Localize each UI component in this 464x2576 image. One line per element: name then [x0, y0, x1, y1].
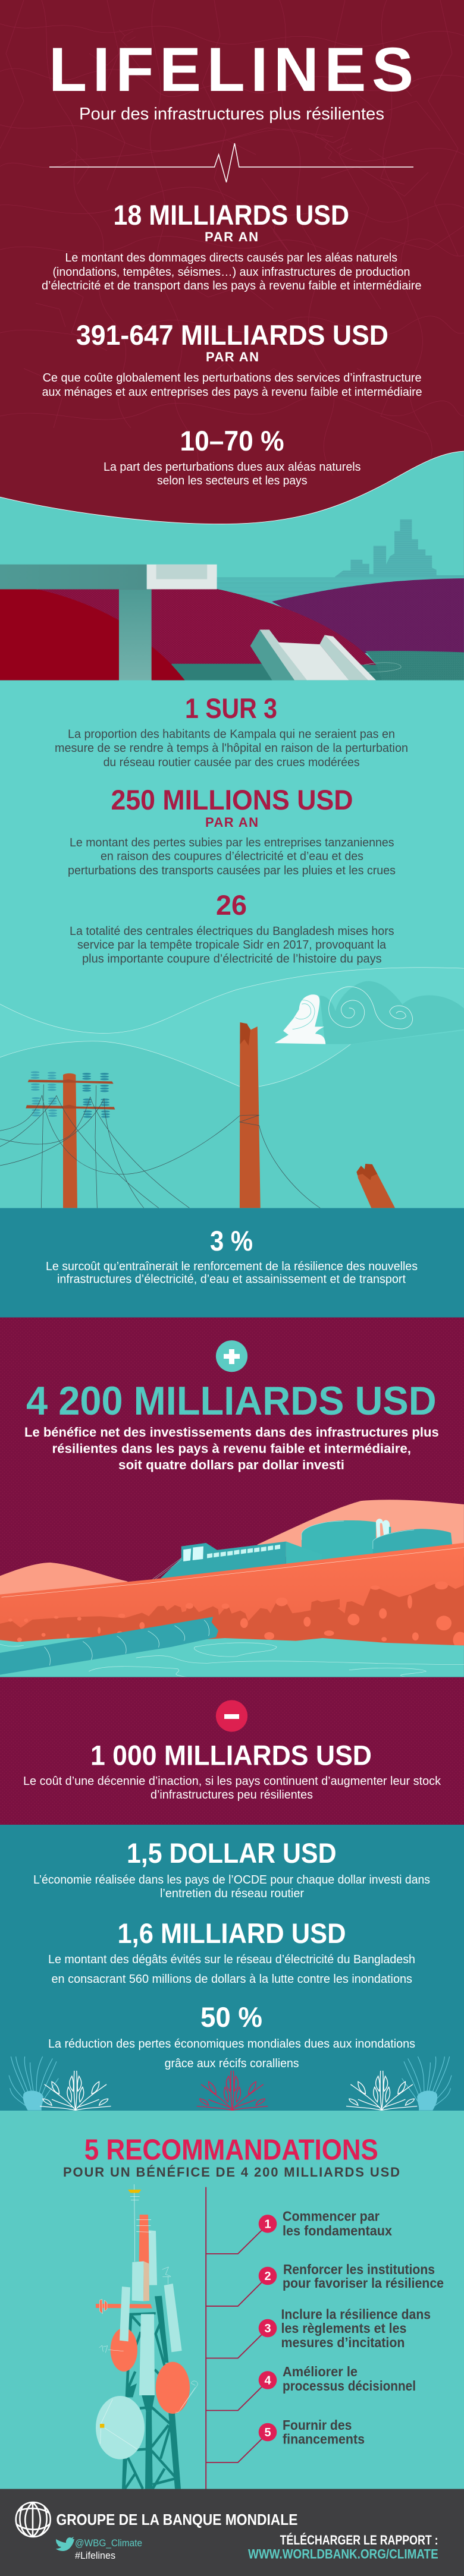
recommendation 1: les fondamentaux — [283, 2223, 392, 2238]
building — [160, 1542, 286, 1579]
title: LIFELINES — [49, 35, 413, 105]
stat: 50 % — [48, 2001, 415, 2070]
stat: 250 millions — [68, 784, 396, 877]
broken pole 2 — [240, 1022, 261, 1208]
broken pole 3 — [358, 1170, 395, 1208]
magenta hill — [37, 589, 377, 665]
stat: 1,5 dollar: 1,5 DOLLAR USD — [127, 1837, 337, 1869]
stat: 4 200 milliards: soit quatre dollars par dollar investi — [118, 1457, 344, 1472]
stat: 250 millions: en raison des coupures d’électricité et d’eau et des — [101, 850, 363, 863]
recommendation 3: Inclure la résilience dans — [281, 2306, 431, 2322]
illustration: power pole with wires — [0, 1071, 240, 1208]
recommendation 5: financements — [283, 2432, 365, 2447]
stat: 10-70 % — [104, 425, 360, 487]
stat: 1,5 dollar — [33, 1837, 430, 1900]
stat: 18 milliards: PAR AN — [205, 229, 258, 244]
stat: 1,6 milliard: en consacrant 560 millions de dollars à la lutte contre les inondations — [51, 1973, 412, 1986]
stat: 1 sur 3: La proportion des habitants de Kampala qui ne seraient pas en — [68, 728, 395, 741]
distant skyline — [335, 519, 464, 578]
stat: 1 sur 3: 1 SUR 3 — [185, 692, 277, 724]
wires — [0, 1084, 240, 1208]
teal sky with curved edge — [0, 451, 464, 681]
salmon dish 1 — [111, 2328, 137, 2372]
dark water — [171, 651, 464, 681]
red hill — [0, 589, 185, 681]
recommendation 3: 3 — [264, 2322, 271, 2335]
recommendation 3: les règlements et les — [281, 2320, 407, 2336]
cloud shadow — [319, 981, 464, 1044]
stat: 391-647 milliards: PAR AN — [206, 349, 259, 364]
stat: 1 000 milliards: d’infrastructures peu résilientes — [151, 1788, 313, 1802]
stat: 50 %: 50 % — [200, 2001, 262, 2033]
stat: 18 milliards: Le montant des dommages directs causés par les aléas naturels — [65, 251, 397, 264]
heading: 5 recommandations: POUR UN BÉNÉFICE DE 4 200 MILLIARDS USD — [63, 2165, 400, 2180]
stat: 4 200 milliards — [24, 1378, 439, 1472]
stat: 26 — [70, 889, 394, 965]
stat: 391-647 milliards: 391-647 MILLIARDS USD — [76, 319, 388, 351]
stat: 1 sur 3 — [55, 692, 408, 769]
recommendation 1 — [259, 2209, 392, 2238]
footer: @WBG_Climate — [75, 2537, 142, 2549]
stat: 26: plus importante coupure d’électricité de l’histoire du pays — [82, 952, 382, 965]
heading: 5 recommandations — [63, 2134, 400, 2180]
illustration: telecom tower — [96, 2184, 197, 2489]
recommendation 2: Renforcer les institutions — [283, 2262, 435, 2277]
stat: 10-70 %: La part des perturbations dues aux aléas naturels — [104, 461, 360, 474]
footer: GROUPE DE LA BANQUE MONDIALE — [56, 2511, 297, 2528]
recommendation 5 — [259, 2417, 365, 2447]
stat: 50 %: grâce aux récifs coralliens — [165, 2057, 299, 2070]
heartbeat divider — [49, 143, 413, 182]
stat: 1,5 dollar: L’économie réalisée dans les pays de l’OCDE pour chaque dollar investi dans — [33, 1873, 430, 1887]
recommendation 1: Commencer par — [283, 2209, 380, 2224]
storage tanks — [302, 1520, 376, 1562]
stat: 50 %: La réduction des pertes économiques mondiales dues aux inondations — [48, 2038, 415, 2051]
recommendation 4: 4 — [264, 2374, 271, 2387]
footer: #Lifelines — [75, 2550, 115, 2561]
icon: twitter bird — [56, 2537, 74, 2551]
pipeline — [0, 1617, 218, 1675]
stat: 18 milliards: 18 MILLIARDS USD — [113, 199, 349, 231]
stat: 1,6 milliard — [48, 1917, 415, 1986]
stat: 391-647 milliards: Ce que coûte globalement les perturbations des services d’infrastructure — [43, 371, 422, 385]
recommendation 2: 2 — [264, 2270, 271, 2283]
recommendation 1: 1 — [264, 2218, 271, 2231]
stat: 1 sur 3: mesure de se rendre à temps à l'hôpital en raison de la perturbation — [55, 742, 408, 755]
stat: 26: 26 — [216, 889, 247, 921]
stat: 250 millions: Le montant des pertes subies par les entreprises tanzaniennes — [70, 836, 394, 849]
stat: 26: La totalité des centrales électriques du Bangladesh mises hors — [70, 925, 394, 938]
illustration: broken poles — [240, 1022, 395, 1208]
stat: 10-70 %: 10–70 % — [180, 425, 284, 456]
road map texture — [0, 0, 464, 475]
recommendation 2 — [259, 2262, 444, 2291]
stat: 250 millions: 250 MILLIONS USD — [111, 784, 353, 815]
stat: 250 millions: PAR AN — [205, 815, 258, 830]
recommendation 2: pour favoriser la résilience — [283, 2275, 444, 2291]
purple hill — [272, 578, 464, 653]
panel: recommendations background — [0, 2111, 464, 2489]
stat: 26: service par la tempête tropicale Sidr en 2017, provoquant la — [77, 939, 387, 952]
top mast — [130, 2184, 151, 2262]
stat: 391-647 milliards: aux ménages et aux entreprises des pays à revenu faible et intermédiaire — [42, 386, 422, 399]
wind spiral — [329, 987, 412, 1029]
panel: 3 % surcost: Le surcoût qu’entraînerait le renforcement de la résilience des nouvelles — [46, 1260, 418, 1273]
stat: 4 200 milliards: Le bénéfice net des investissements dans des infrastructures plus — [24, 1425, 439, 1440]
panel: solutions teal background — [0, 1825, 464, 2111]
footer — [0, 2489, 464, 2576]
stat: 18 milliards: d’électricité et de transport dans les pays à revenu faible et intermédiaire — [42, 279, 421, 292]
stat: 1 000 milliards — [23, 1739, 441, 1802]
stat: 1 sur 3: du réseau routier causée par des crues modérées — [104, 756, 360, 769]
illustration: coral reef — [9, 2057, 452, 2111]
stat: 1,5 dollar: l’entretien du réseau routier — [160, 1887, 304, 1900]
illustration: salmon hills — [0, 1500, 464, 1598]
lattice — [122, 2296, 181, 2489]
fallen road — [250, 629, 376, 680]
footer: WWW.WORLDBANK.ORG/CLIMATE — [248, 2546, 438, 2562]
panel: impacts teal background — [0, 680, 464, 1208]
panel: purple benefits background — [0, 1317, 464, 1825]
panel: 3 % surcost: infrastructures d’électricité, d’eau et assainissement et de transport — [57, 1273, 406, 1286]
water — [0, 1636, 464, 1677]
crossbar — [96, 2304, 152, 2309]
illustration: treatment plant — [153, 1519, 452, 1580]
subtitle: Pour des infrastructures plus résilientes — [79, 105, 384, 124]
stat: 250 millions: perturbations des transports causées par les pluies et les crues — [68, 864, 396, 877]
recommendation 5: 5 — [264, 2426, 271, 2439]
icon: minus — [216, 1700, 247, 1732]
stat: 4 200 milliards: résilientes dans les pays à revenu faible et intermédiaire, — [52, 1441, 411, 1456]
panels — [120, 2287, 130, 2341]
rocks — [0, 1584, 464, 1647]
stat: 18 milliards — [42, 199, 421, 292]
recommendation 5: Fournir des — [283, 2417, 352, 2433]
salmon dish 2 — [156, 2362, 190, 2414]
big dish — [96, 2396, 145, 2460]
illustration: flooded bridge scene — [0, 451, 464, 681]
recommendation connectors — [206, 2187, 262, 2489]
recommendation 4: processus décisionnel — [283, 2378, 416, 2394]
panel: 3 % surcost: 3 % — [210, 1225, 253, 1256]
illustration: storm background hills — [0, 968, 464, 1208]
stat: 1 000 milliards: 1 000 MILLIARDS USD — [90, 1739, 372, 1771]
bridge deck — [0, 565, 147, 589]
bridge pillar — [119, 589, 152, 681]
recommendation 3: mesures d’incitation — [281, 2335, 405, 2350]
panel: 3 % surcost — [0, 1208, 464, 1317]
heading: 5 recommandations: 5 RECOMMANDATIONS — [84, 2134, 378, 2166]
stat: 391-647 milliards — [42, 319, 422, 399]
insulators — [31, 1071, 57, 1117]
illustration: storm cloud and wind — [275, 981, 464, 1044]
recommendation 3 — [259, 2306, 431, 2350]
white cloud — [275, 994, 325, 1044]
recommendation 4: Améliorer le — [283, 2364, 358, 2379]
stat: 10-70 %: selon les secteurs et les pays — [157, 474, 307, 487]
recommendation 4 — [259, 2364, 416, 2394]
stat: 1,6 milliard: Le montant des dégâts évités sur le réseau d’électricité du Bangladesh — [48, 1953, 415, 1966]
stripes — [217, 577, 464, 604]
panel: header burgundy background — [0, 0, 464, 541]
icon: world bank globe — [16, 2502, 51, 2537]
stat: 1 000 milliards: Le coût d’une décennie d’inaction, si les pays continuent d’augmenter leur stock — [23, 1775, 441, 1788]
stat: 18 milliards: (inondations, tempêtes, séismes…) aux infrastructures de production — [52, 266, 410, 279]
icon: plus — [216, 1340, 247, 1372]
stat: 4 200 milliards: 4 200 MILLIARDS USD — [26, 1378, 437, 1424]
cooling outflow — [376, 1519, 390, 1538]
stat: 1,6 milliard: 1,6 MILLIARD USD — [118, 1917, 346, 1949]
illustration: orange embankment, water and pipeline — [0, 1543, 464, 1677]
